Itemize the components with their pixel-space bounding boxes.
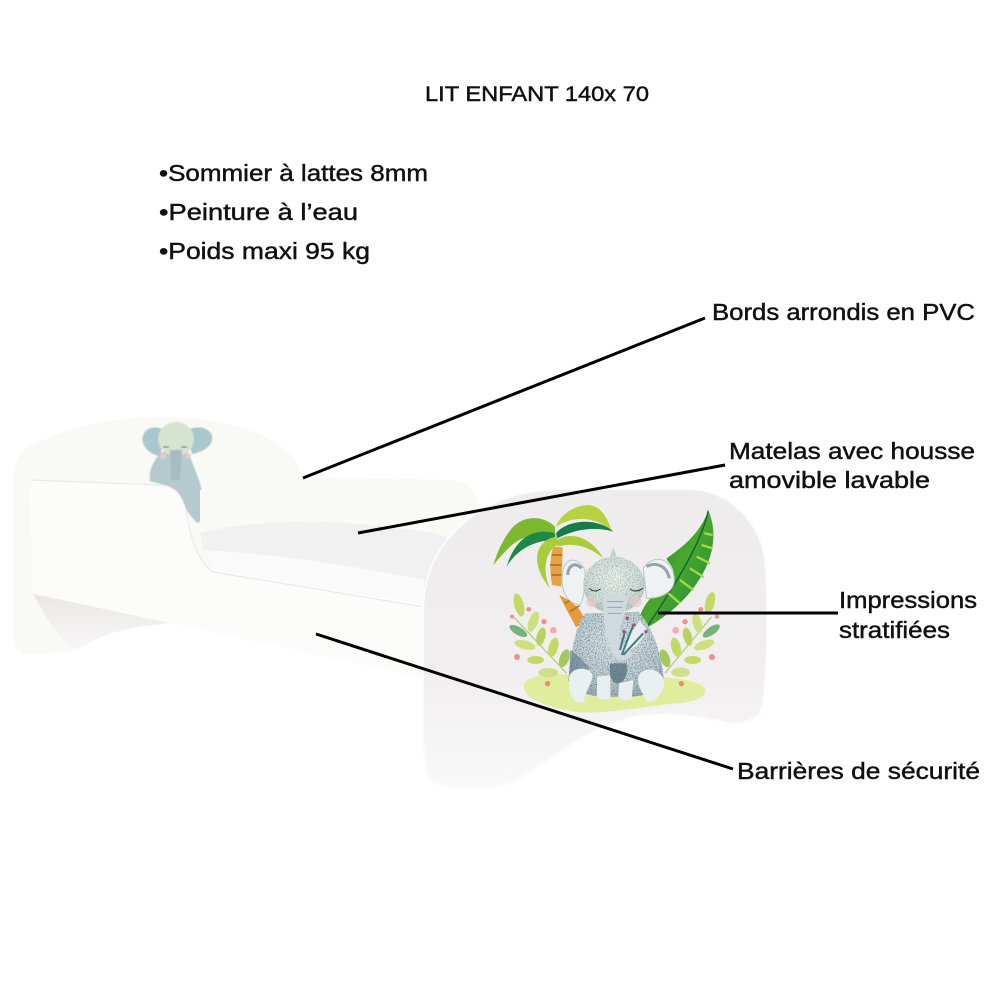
footboard panel: [423, 489, 767, 789]
callout line: impressions: [658, 612, 838, 614]
label: impressions: Impressions: [839, 587, 977, 613]
palm fronds: [493, 518, 555, 565]
elephant trunk: [603, 593, 633, 660]
label: impressions: [839, 587, 977, 643]
callout line: bords arrondis: [303, 318, 705, 478]
jungle elephant artwork: [493, 505, 722, 713]
back rail: [200, 477, 480, 560]
elephant head: [583, 557, 645, 613]
mattress: [200, 522, 470, 604]
elephant ears: [562, 560, 585, 605]
front side rail: [30, 480, 424, 678]
callout line: barrières: [316, 634, 733, 769]
pink berries: [510, 607, 719, 686]
label: bords arrondis: Bords arrondis en PVC: [712, 299, 975, 325]
bed illustration: [13, 417, 767, 789]
label: matelas: amovible lavable: [729, 467, 930, 493]
shadow under the side rail: [33, 594, 170, 650]
bullet list: •Sommier à lattes 8mm: [159, 160, 428, 186]
flower bouquet: [620, 620, 647, 656]
bullet list: •Peinture à l’eau: [159, 199, 358, 225]
headboard: [13, 417, 302, 654]
label: matelas: [729, 438, 975, 493]
callout line: matelas: [358, 465, 725, 533]
title: LIT ENFANT 140x 70: [425, 83, 649, 106]
label: matelas: Matelas avec housse: [729, 438, 975, 464]
label: barrières: Barrières de sécurité: [737, 758, 980, 784]
label: impressions: stratifiées: [839, 617, 950, 643]
bullet list: [159, 160, 428, 264]
grass: [524, 674, 705, 713]
elephant body: [568, 612, 664, 697]
bullet list: •Poids maxi 95 kg: [159, 238, 370, 264]
laurel branch left: [508, 592, 572, 677]
palm trunk: [550, 547, 563, 587]
elephant legs: [569, 669, 592, 703]
small elephant on headboard: [142, 422, 212, 523]
laurel branch right: [657, 591, 722, 677]
big leaf: [639, 511, 713, 628]
